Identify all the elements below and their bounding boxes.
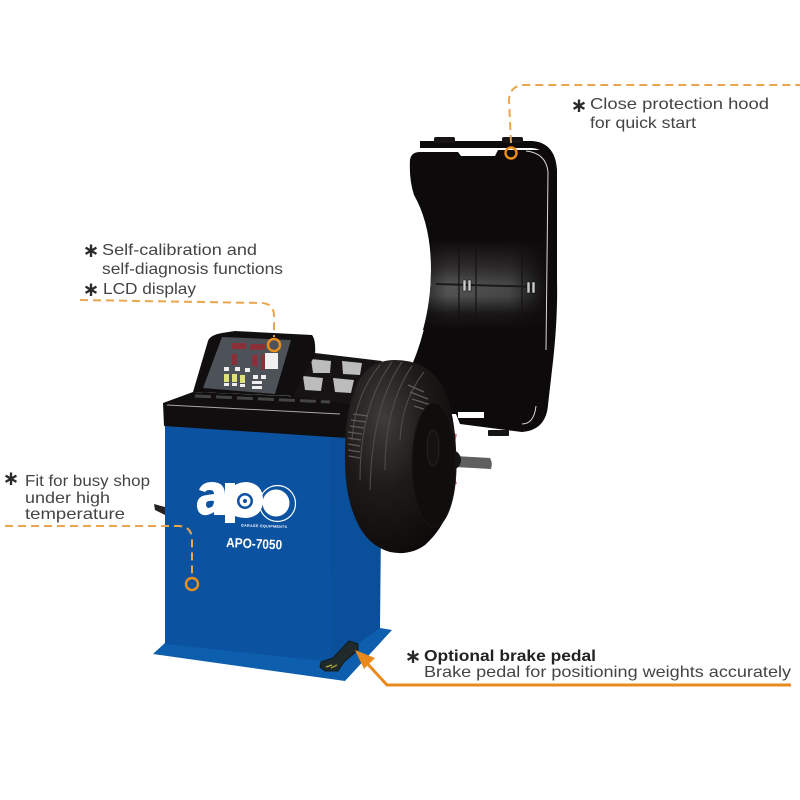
weight cups (311, 359, 331, 373)
arrow (364, 660, 791, 685)
brake pedal (320, 641, 358, 671)
protection hood (410, 137, 557, 436)
tray body (290, 352, 382, 412)
callout: hood (506, 85, 800, 158)
cabinet (154, 420, 382, 662)
base plate (153, 628, 392, 681)
hood shell (410, 150, 557, 432)
temperature text: ∗ (3, 466, 19, 490)
display panel (203, 337, 291, 394)
display text: ∗ (83, 238, 99, 262)
callout: temperature: under high (25, 490, 110, 507)
pedal text: ∗ (405, 644, 421, 668)
logo tagline: GARAGE EQUIPMENTS (241, 524, 288, 529)
hood cross rod (436, 280, 542, 293)
callout: temperature (3, 466, 198, 590)
LED readouts (232, 343, 246, 349)
shoulder ribs (348, 385, 433, 458)
wheel rim (412, 403, 456, 527)
callout: brake pedal (355, 644, 791, 685)
wheel assembly (345, 360, 492, 553)
flange (441, 450, 461, 470)
callout: brake pedal: Brake pedal for positioning weights accurately (424, 664, 791, 681)
console deck (163, 392, 355, 438)
keypad (224, 374, 229, 382)
apo logo (197, 482, 296, 529)
model number: APO-7050 (226, 535, 282, 552)
white key strip (265, 353, 278, 369)
callout: display (80, 238, 283, 351)
callout: display: LCD display (103, 281, 196, 298)
shaft (455, 456, 492, 469)
hood text: ∗ (571, 93, 587, 117)
letter a (197, 482, 225, 515)
letter o (262, 490, 290, 516)
hood tube frame (420, 144, 554, 220)
callout: display: ∗ (83, 277, 99, 301)
console tray (290, 352, 382, 412)
callout: temperature: temperature (25, 506, 125, 523)
hood vertical seams (459, 248, 522, 320)
display pod (193, 331, 315, 396)
callout: display: self-diagnosis functions (102, 261, 283, 278)
callout: brake pedal: Optional brake pedal (424, 648, 596, 665)
callout: temperature: Fit for busy shop (25, 473, 150, 490)
cabinet side (330, 420, 382, 662)
callout: display: Self-calibration and (102, 242, 257, 259)
callout: hood: for quick start (590, 115, 697, 132)
cabinet handle (154, 504, 165, 515)
hood clamps (434, 137, 455, 143)
cabinet front (165, 420, 335, 662)
letter p (225, 482, 263, 523)
tread (352, 362, 424, 490)
tyre (345, 360, 456, 553)
callout: hood: Close protection hood (590, 96, 769, 113)
hood light band (423, 240, 546, 330)
wheel icon (237, 493, 253, 509)
